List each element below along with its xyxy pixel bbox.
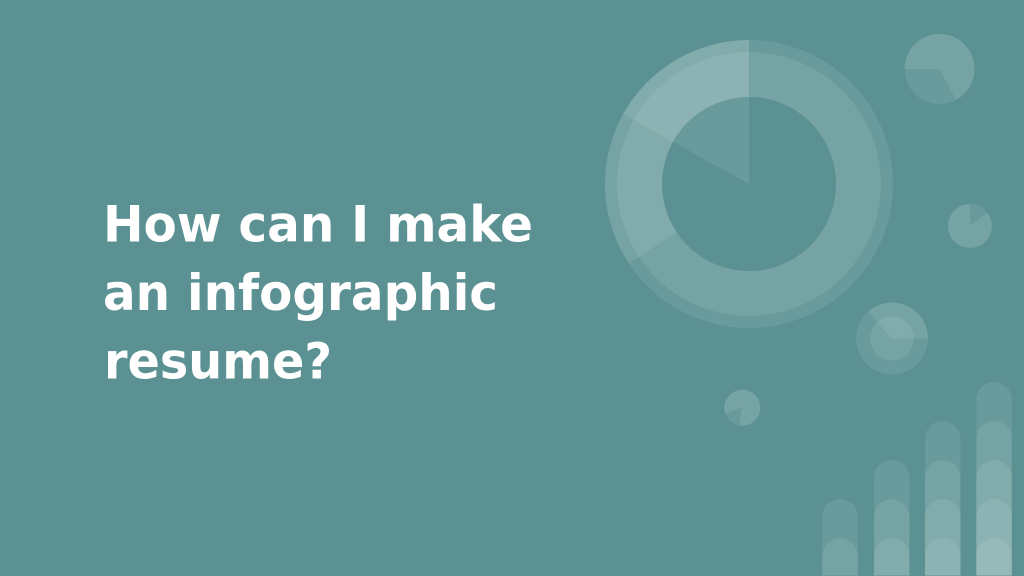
stacked rounded bar chart bbox=[822, 382, 1012, 576]
right small pie chart bbox=[948, 204, 992, 248]
title bbox=[103, 196, 533, 390]
small donut chart bbox=[856, 302, 928, 374]
title: an infographic bbox=[103, 264, 498, 322]
title: How can I make bbox=[103, 196, 533, 254]
large donut chart bbox=[605, 40, 864, 299]
top right pie chart bbox=[904, 34, 974, 104]
lower small pie chart bbox=[724, 390, 760, 426]
title: resume? bbox=[104, 332, 332, 390]
